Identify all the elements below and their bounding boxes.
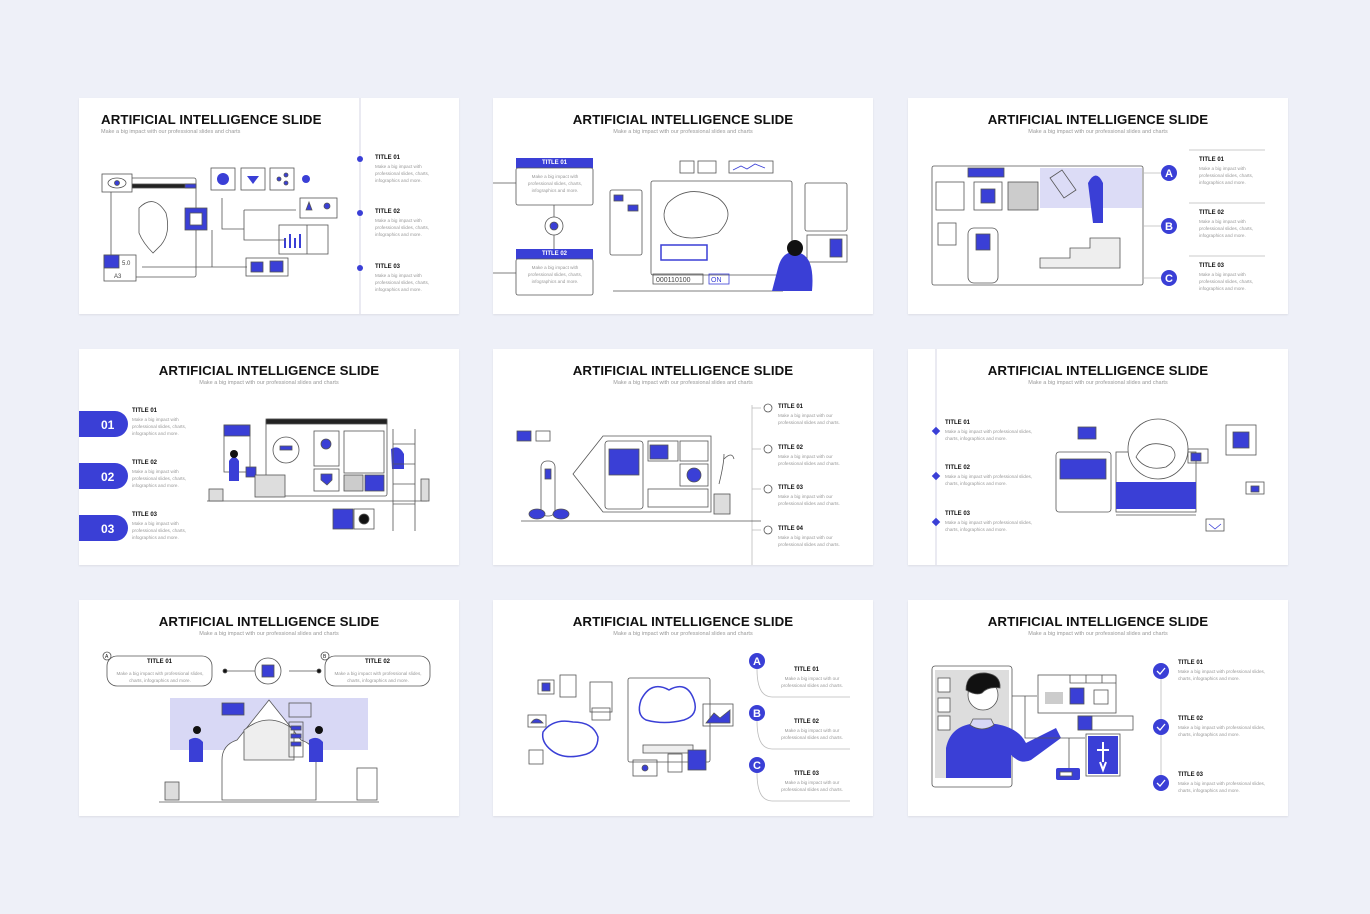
text block: titles: TITLE 01	[132, 408, 157, 414]
illustration	[932, 150, 1265, 286]
slide 1	[79, 98, 459, 314]
text block: titles: TITLE 02	[945, 465, 970, 471]
illustration: 5.0	[122, 261, 131, 267]
text block: titles: TITLE 03	[945, 511, 970, 517]
text block: titles: Make a big impact with professional slides, charts, infographics and more.	[1178, 669, 1265, 681]
illustration: A	[1165, 168, 1173, 180]
slide 8	[493, 600, 873, 816]
text block: titles: Make a big impact with professional slides, charts, infographics and more.	[132, 417, 186, 436]
title: ARTIFICIAL INTELLIGENCE SLIDE	[159, 614, 379, 629]
text block: titles: Make a big impact with professional slides, charts, infographics and more.	[1199, 166, 1253, 185]
text block: titles: TITLE 03	[375, 264, 400, 270]
subtitle: Make a big impact with our professional slides and charts	[613, 129, 753, 135]
illustration: A	[105, 654, 109, 660]
subtitle: Make a big impact with our professional slides and charts	[199, 380, 339, 386]
text block: titles	[781, 666, 843, 792]
number tabs: 02	[101, 470, 115, 484]
title: ARTIFICIAL INTELLIGENCE SLIDE	[573, 363, 793, 378]
title: ARTIFICIAL INTELLIGENCE SLIDE	[101, 112, 322, 127]
text block: titles: TITLE 02	[794, 719, 819, 725]
illustration	[932, 663, 1169, 791]
text block: titles: TITLE 01	[1199, 157, 1224, 163]
title: ARTIFICIAL INTELLIGENCE SLIDE	[988, 614, 1208, 629]
text block: titles: TITLE 03	[132, 512, 157, 518]
text block: titles: Make a big impact with professional slides, charts, infographics and more.	[945, 429, 1032, 441]
illustration: ON	[711, 277, 722, 284]
text block: titles: TITLE 01	[1178, 660, 1203, 666]
text block: titles: Make a big impact with our professional slides and charts.	[778, 494, 840, 506]
text block: titles	[1178, 660, 1265, 793]
illustration: A	[753, 656, 761, 668]
text block: titles	[1199, 156, 1253, 291]
text block: titles: Make a big impact with professional slides, charts, infographics and more.	[116, 671, 204, 683]
text block: titles: Make a big impact with our professional slides and charts.	[781, 676, 843, 688]
text block: titles: TITLE 01	[375, 155, 400, 161]
text block: titles	[945, 420, 1032, 532]
number tabs	[79, 411, 430, 541]
subtitle: Make a big impact with our professional slides and charts	[1028, 380, 1168, 386]
text block: titles	[778, 404, 840, 547]
text block: titles: Make a big impact with professional slides, charts, infographics and more.	[334, 671, 422, 683]
text block: titles: TITLE 03	[778, 485, 803, 491]
illustration	[102, 98, 363, 314]
text block: titles: Make a big impact with professional slides, charts, infographics and more.	[1178, 725, 1265, 737]
text block: titles: TITLE 03	[1199, 263, 1224, 269]
text block: titles	[375, 154, 429, 292]
text block: titles	[132, 408, 186, 540]
subtitle: Make a big impact with our professional slides and charts	[199, 631, 339, 637]
slide 5	[493, 349, 873, 565]
text block: titles: Make a big impact with professional slides, charts, infographics and more.	[132, 521, 186, 540]
subtitle: Make a big impact with our professional slides and charts	[613, 380, 753, 386]
text block: titles: TITLE 02	[365, 659, 390, 665]
text block: titles: Make a big impact with our professional slides and charts.	[781, 728, 843, 740]
illustration: B	[323, 654, 327, 660]
text block: titles: TITLE 02	[1199, 210, 1224, 216]
text block: titles: TITLE 01	[794, 667, 819, 673]
title: ARTIFICIAL INTELLIGENCE SLIDE	[988, 363, 1208, 378]
slide 3	[908, 98, 1288, 314]
text block: titles: TITLE 01	[542, 160, 567, 166]
number tabs: 03	[101, 522, 115, 536]
subtitle: Make a big impact with our professional slides and charts	[613, 631, 753, 637]
text block: titles: Make a big impact with our professional slides and charts.	[778, 454, 840, 466]
illustration	[493, 158, 848, 296]
text block: titles: TITLE 02	[542, 251, 567, 257]
text block: titles: Make a big impact with professional slides, charts, infographics and more.	[132, 469, 186, 488]
text block: titles: Make a big impact with professional slides, charts, infographics and more.	[375, 273, 429, 292]
illustration	[932, 349, 1264, 565]
illustration	[528, 653, 850, 802]
slide 6	[908, 349, 1288, 565]
text block: titles: TITLE 01	[147, 659, 172, 665]
text block: titles: TITLE 02	[375, 209, 400, 215]
text block: titles: Make a big impact with professional slides, charts, infographics and more.	[1199, 272, 1253, 291]
subtitle: Make a big impact with our professional slides and charts	[1028, 631, 1168, 637]
illustration: 000110100	[656, 277, 691, 284]
slide 4	[79, 349, 459, 565]
text block: titles: Make a big impact with our professional slides and charts.	[781, 780, 843, 792]
text block: titles	[528, 160, 582, 284]
illustration: C	[1165, 273, 1173, 285]
title: ARTIFICIAL INTELLIGENCE SLIDE	[159, 363, 379, 378]
illustration: A3	[114, 274, 122, 280]
text block: titles: Make a big impact with professional slides, charts, infographics and more.	[528, 265, 582, 284]
text block: titles: Make a big impact with professional slides, charts, infographics and more.	[945, 520, 1032, 532]
text block: titles: Make a big impact with professional slides, charts, infographics and more.	[1199, 219, 1253, 238]
text block: titles: TITLE 03	[794, 771, 819, 777]
subtitle: Make a big impact with our professional slides and charts	[101, 129, 240, 135]
text block: titles: Make a big impact with our professional slides and charts.	[778, 535, 840, 547]
illustration: C	[753, 760, 761, 772]
number tabs: 01	[101, 418, 115, 432]
text block: titles: Make a big impact with professional slides, charts, infographics and more.	[528, 174, 582, 193]
text block: titles: TITLE 03	[1178, 772, 1203, 778]
text block: titles: Make a big impact with professional slides, charts, infographics and more.	[945, 474, 1032, 486]
illustration: B	[753, 708, 761, 720]
text block: titles: Make a big impact with professional slides, charts, infographics and more.	[375, 218, 429, 237]
text block: titles: Make a big impact with our professional slides and charts.	[778, 413, 840, 425]
text block: titles: TITLE 02	[1178, 716, 1203, 722]
slide 2	[493, 98, 873, 314]
title: ARTIFICIAL INTELLIGENCE SLIDE	[988, 112, 1208, 127]
text block: titles: Make a big impact with professional slides, charts, infographics and more.	[1178, 781, 1265, 793]
illustration	[102, 652, 430, 802]
text block: titles: TITLE 02	[778, 445, 803, 451]
title: ARTIFICIAL INTELLIGENCE SLIDE	[573, 112, 793, 127]
subtitle: Make a big impact with our professional slides and charts	[1028, 129, 1168, 135]
title: ARTIFICIAL INTELLIGENCE SLIDE	[573, 614, 793, 629]
text block: titles: Make a big impact with professional slides, charts, infographics and more.	[375, 164, 429, 183]
illustration: B	[1165, 221, 1173, 233]
slide 9	[908, 600, 1288, 816]
text block: titles: TITLE 04	[778, 526, 803, 532]
text block: titles: TITLE 02	[132, 460, 157, 466]
slide 7	[79, 600, 459, 816]
text block: titles: TITLE 01	[778, 404, 803, 410]
illustration	[516, 404, 772, 565]
text block: titles	[116, 658, 422, 683]
text block: titles: TITLE 01	[945, 420, 970, 426]
